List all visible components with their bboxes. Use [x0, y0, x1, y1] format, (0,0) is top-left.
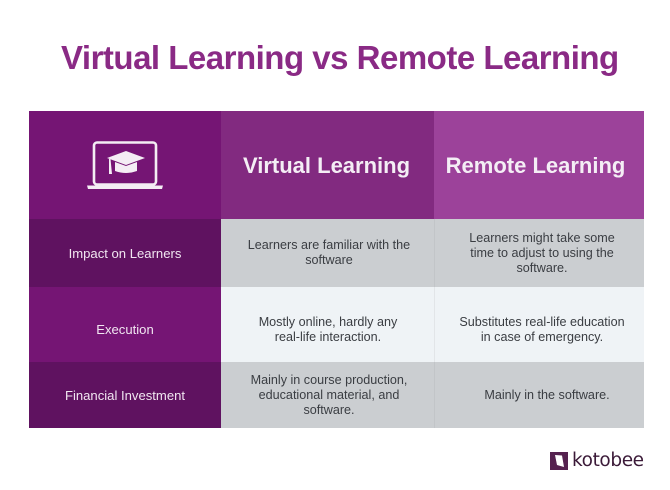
wordmark: kotobee — [572, 450, 644, 471]
cell: remote execution — [434, 287, 644, 362]
header: Virtual Learning: Virtual Learning — [243, 153, 410, 178]
cell: remote impact: time to adjust to using the — [470, 246, 614, 260]
cell: virtual investment: software. — [303, 402, 355, 416]
row label: Execution: Execution — [96, 322, 154, 337]
header: Remote Learning: Remote Learning — [446, 153, 625, 178]
cell: remote impact: software. — [516, 260, 568, 274]
icon panel — [29, 111, 221, 219]
cell: virtual impact: Learners are familiar with the — [248, 238, 410, 252]
cell: virtual investment: educational material, and — [259, 388, 399, 402]
row label: Financial Investment: Financial Investment — [65, 388, 185, 402]
icon: laptop with graduation cap — [87, 141, 163, 189]
row label: Financial Investment — [29, 362, 221, 428]
title: Virtual Learning vs Remote Learning — [61, 39, 619, 76]
cell: remote impact: Learners might take some — [469, 230, 615, 244]
cell: virtual impact: software — [305, 252, 353, 266]
row label: Impact on Learners: Impact on Learners — [69, 246, 181, 260]
cell: remote investment: Mainly in the software. — [484, 388, 610, 402]
cell: remote execution: in case of emergency. — [481, 330, 603, 344]
cell: virtual execution: Mostly online, hardly any — [259, 315, 397, 329]
row label: Impact on Learners — [29, 219, 221, 287]
cell: remote execution: Substitutes real-life education — [459, 315, 625, 329]
header: Virtual Learning — [221, 111, 434, 219]
cell: virtual investment — [221, 362, 434, 428]
cell: virtual investment: Mainly in course production, — [251, 372, 407, 386]
icon: kotobee book — [550, 452, 568, 470]
cell: remote impact — [434, 219, 644, 287]
cell: virtual execution: real-life interaction. — [275, 330, 381, 344]
logo: kotobee — [550, 450, 644, 471]
cell: remote investment — [434, 362, 644, 428]
cell: virtual impact — [221, 219, 434, 287]
cell: virtual execution — [221, 287, 434, 362]
header: Remote Learning — [434, 111, 644, 219]
comparison table — [29, 111, 644, 428]
row label: Execution — [29, 287, 221, 362]
